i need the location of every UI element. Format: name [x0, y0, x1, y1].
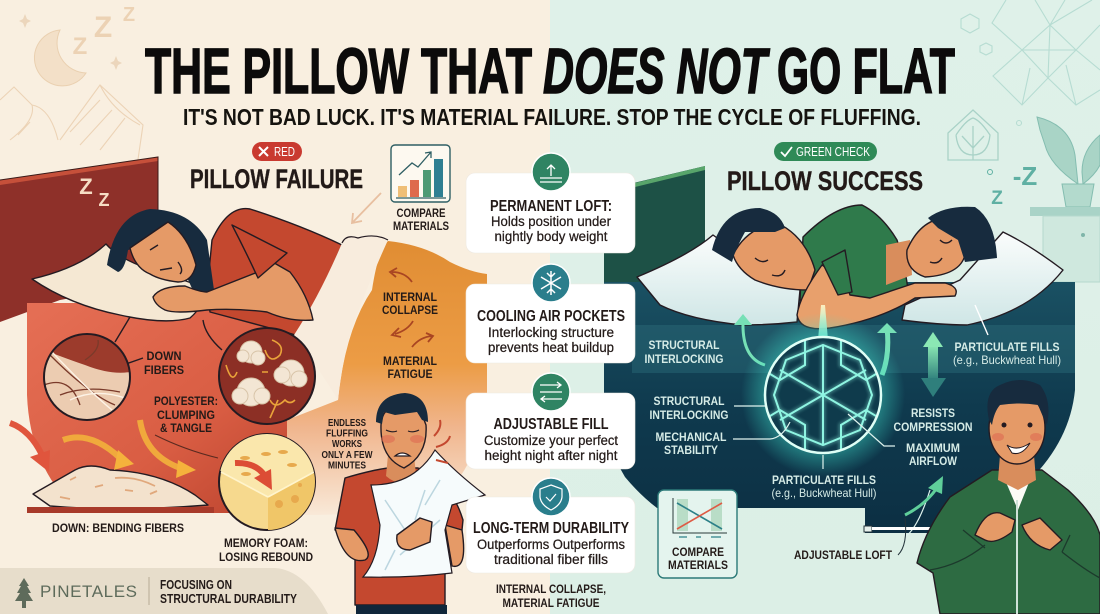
light beam	[818, 305, 828, 340]
decoration: house and tree icon	[948, 110, 998, 160]
labels: success scene: INTERLOCKING	[644, 352, 724, 366]
callout: endless fluffing: ENDLESS	[328, 417, 366, 429]
green pill	[774, 142, 877, 161]
decoration: moon and sleep letters: Z	[123, 4, 135, 26]
decoration: mountain outline	[0, 85, 143, 180]
heading: pillow failure: PILLOW FAILURE	[190, 164, 363, 194]
arrow: yellow right	[63, 437, 134, 470]
panel: pillow success scene	[604, 142, 1100, 614]
sleeping man arm	[797, 265, 956, 329]
sleeping man body	[800, 205, 908, 300]
left pillow	[637, 235, 800, 325]
card: permanent loft: nightly body weight	[494, 229, 608, 244]
arrow: green to adjustable	[905, 476, 943, 515]
card: long-term durability: Outperforms Outperforms	[477, 537, 625, 552]
sleeping person face	[130, 222, 196, 282]
brand name: PINETALES	[40, 582, 137, 601]
sleeping person hair	[107, 209, 214, 295]
blanket	[294, 236, 388, 400]
labels: failure scene: INTERNAL	[383, 290, 437, 304]
labels: success scene: MAXIMUM	[906, 441, 960, 455]
decoration: right sleep letters: Z	[991, 188, 1003, 209]
decoration: moon and sleep letters	[19, 4, 135, 86]
decoration: moon and sleep letters: Z	[73, 33, 87, 60]
person holding pillow	[335, 393, 485, 614]
labels: success scene: INTERLOCKING	[650, 408, 728, 422]
bottom caption: MATERIAL FATIGUE	[502, 596, 600, 610]
title: GO FLAT	[777, 35, 955, 107]
brand tagline: STRUCTURAL DURABILITY	[160, 591, 297, 606]
arrow: to compare materials	[352, 193, 381, 223]
headboard: Z	[98, 190, 110, 210]
labels: success scene: PARTICULATE FILLS	[772, 473, 876, 487]
labels: failure scene: COLLAPSE	[382, 303, 438, 317]
background: right mint panel	[550, 0, 1100, 614]
base line	[27, 507, 214, 513]
labels: failure scene: POLYESTER:	[154, 394, 218, 408]
callout: endless fluffing: MINUTES	[328, 460, 366, 472]
bottom caption	[496, 582, 606, 610]
background: left warm panel	[0, 0, 550, 614]
title: THE PILLOW THAT	[145, 35, 532, 107]
labels: failure scene: COMPARE	[396, 206, 446, 220]
labels: failure scene: DOWN: BENDING FIBERS	[52, 521, 184, 535]
flat pillow	[33, 466, 208, 509]
labels: success scene: STRUCTURAL	[654, 394, 724, 408]
pillow	[32, 244, 206, 321]
line from pillow to circle	[115, 317, 222, 365]
card: adjustable fill: height night after night	[484, 448, 618, 463]
card: permanent loft: PERMANENT LOFT:	[490, 198, 612, 215]
decoration: moon and sleep letters: Z	[94, 11, 112, 44]
panel: benefit cards	[466, 153, 635, 573]
sleeping man left head	[712, 208, 815, 290]
subtitle: IT'S NOT BAD LUCK. IT'S MATERIAL FAILURE. STOP THE CYCLE OF FLUFFING.	[183, 104, 921, 130]
bottom caption: INTERNAL COLLAPSE,	[496, 582, 606, 596]
labels: success scene: MECHANICAL	[656, 430, 726, 444]
labels: failure scene: MEMORY FOAM:	[224, 536, 308, 550]
labels: failure scene: CLUMPING	[157, 408, 215, 422]
brand divider	[148, 577, 150, 605]
card: adjustable fill: Customize your perfect	[484, 433, 618, 448]
circle: memory foam	[219, 430, 316, 530]
headboard: Z	[79, 174, 93, 199]
brand tagline: FOCUSING ON	[160, 577, 232, 592]
labels: success scene: AIRFLOW	[909, 454, 958, 468]
card: long-term durability: traditional fiber fills	[494, 552, 608, 567]
bed dark panel	[604, 282, 1075, 533]
labels: success scene: STABILITY	[664, 443, 718, 457]
mattress: red panel	[27, 303, 300, 513]
card: long-term durability	[466, 478, 635, 573]
labels: success scene: RESISTS	[911, 406, 955, 420]
card: permanent loft	[466, 153, 635, 253]
card: cooling air pockets: COOLING AIR POCKETS	[477, 308, 625, 325]
red pill: RED	[274, 145, 295, 159]
labels: success scene: (e.g., Buckwheat Hull)	[953, 353, 1061, 367]
heading: pillow success: PILLOW SUCCESS	[727, 166, 923, 196]
panel: pillow failure scene	[0, 142, 487, 614]
mattress: orange panel	[287, 241, 487, 515]
title: DOES NOT	[543, 35, 770, 107]
circle: polyester clumps	[219, 328, 315, 424]
headboard	[0, 157, 158, 322]
right pillow	[902, 232, 1063, 325]
green pill: GREEN CHECK	[796, 145, 871, 159]
labels: success scene: COMPARE	[672, 545, 724, 559]
labels: success scene: PARTICULATE FILLS	[954, 340, 1060, 354]
icon: compare materials graph	[658, 490, 737, 578]
red pill	[252, 142, 302, 161]
sleeping person arm	[153, 256, 313, 320]
labels: success scene	[644, 338, 1061, 572]
labels: failure scene: & TANGLE	[160, 421, 212, 435]
decoration: right sleep letters	[988, 161, 1037, 209]
adjustable loft bar	[864, 518, 937, 555]
callout: endless fluffing: ONLY A FEW	[322, 449, 373, 461]
labels: success scene: COMPRESSION	[894, 420, 972, 434]
labels: failure scene: LOSING REBOUND	[219, 550, 313, 564]
arrow: yellow curved	[140, 420, 196, 478]
labels: success scene: ADJUSTABLE LOFT	[794, 548, 893, 562]
card: cooling air pockets: Interlocking structure	[488, 325, 614, 340]
callout: endless fluffing	[322, 417, 373, 472]
callout: endless fluffing: WORKS	[332, 438, 362, 450]
labels: failure scene: MATERIALS	[393, 219, 449, 233]
icon: pine tree	[15, 578, 33, 608]
lighter band	[632, 325, 1075, 373]
labels: success scene: STRUCTURAL	[648, 338, 720, 352]
arrow: thin to foam	[155, 435, 218, 458]
circle: down fibers	[44, 334, 130, 420]
sleeping person shirt	[207, 209, 342, 335]
labels: failure scene: FATIGUE	[388, 367, 432, 381]
crystal lattice circle	[741, 313, 905, 477]
card: adjustable fill	[466, 373, 635, 469]
sleeping man right head	[886, 207, 997, 285]
footer brand band	[0, 568, 328, 614]
leader lines	[733, 406, 930, 537]
headboard	[604, 166, 705, 300]
card: cooling air pockets	[466, 264, 635, 363]
decoration: geometric hexagons	[961, 0, 1100, 126]
card: long-term durability: LONG-TERM DURABILITY	[473, 520, 629, 537]
labels: failure scene: MATERIAL	[383, 354, 437, 368]
happy man	[917, 380, 1100, 614]
decoration: right sleep letters: -Z	[1013, 161, 1037, 191]
decoration: plant on nightstand	[1030, 117, 1100, 282]
callout: endless fluffing: FLUFFING	[326, 428, 368, 440]
labels: failure scene	[52, 206, 449, 564]
arrow: red downward	[10, 423, 50, 472]
small arrows: collapse	[390, 268, 433, 347]
labels: success scene: (e.g., Buckwheat Hull)	[772, 486, 876, 500]
icon: compare materials chart	[391, 145, 450, 202]
brand tagline	[160, 577, 297, 606]
labels: failure scene: FIBERS	[144, 363, 184, 377]
arrows: up green	[734, 305, 988, 397]
card: cooling air pockets: prevents heat buildup	[488, 340, 614, 355]
labels: failure scene: DOWN	[146, 349, 182, 363]
card: permanent loft: Holds position under	[491, 214, 611, 229]
labels: success scene: MATERIALS	[668, 558, 728, 572]
card: adjustable fill: ADJUSTABLE FILL	[494, 416, 609, 433]
